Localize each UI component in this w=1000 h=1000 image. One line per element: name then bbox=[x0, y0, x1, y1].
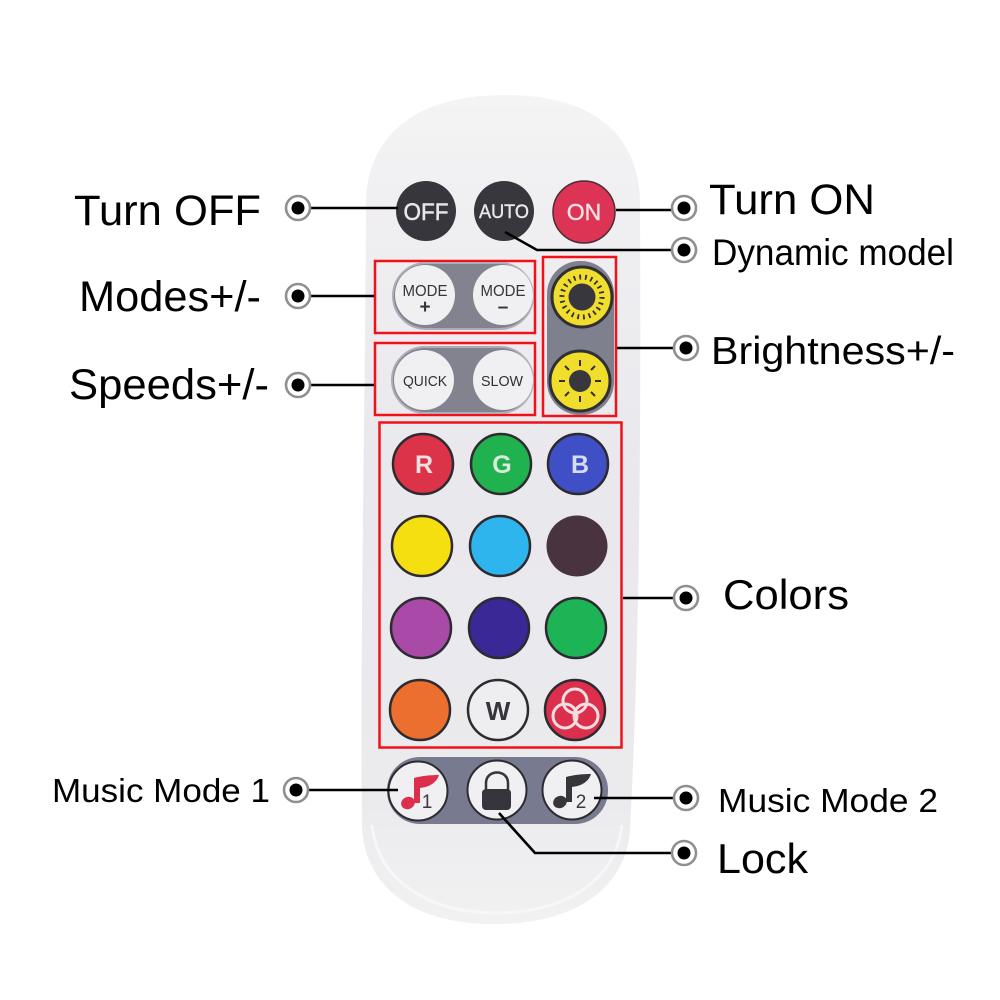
button: QUICK bbox=[394, 350, 454, 410]
button: MODE +: + bbox=[419, 297, 431, 318]
button: W: W bbox=[486, 696, 511, 726]
panel: mode buttons bbox=[375, 261, 535, 333]
label: Music Mode 2: Music Mode 2 bbox=[718, 782, 938, 819]
button: G bbox=[471, 434, 531, 494]
leader lines bbox=[298, 208, 686, 853]
label: Colors: Colors bbox=[723, 571, 849, 618]
label: Brightness+/-: Brightness+/- bbox=[711, 330, 955, 373]
label: Turn OFF: Turn OFF bbox=[74, 187, 261, 235]
button: purple bbox=[391, 598, 451, 658]
panel: speed buttons bbox=[375, 343, 535, 415]
button: color mix bbox=[545, 680, 605, 740]
button: music mode 1 bbox=[388, 762, 448, 820]
panel: brightness buttons bbox=[543, 257, 616, 416]
label: Speeds+/-: Speeds+/- bbox=[69, 361, 269, 409]
button: music mode 2: 2 bbox=[576, 792, 586, 813]
button: OFF: OFF bbox=[404, 199, 448, 226]
button: green bbox=[546, 598, 606, 658]
button: MODE -: – bbox=[498, 297, 508, 318]
button: SLOW: SLOW bbox=[481, 373, 524, 390]
button: B bbox=[548, 434, 608, 494]
button: R: R bbox=[415, 451, 433, 479]
label: Music Mode 1: Music Mode 1 bbox=[52, 772, 270, 809]
label: Dynamic model: Dynamic model bbox=[712, 232, 954, 273]
button: G: G bbox=[492, 451, 512, 479]
button: MODE +: MODE bbox=[402, 283, 448, 300]
button: R bbox=[393, 434, 453, 494]
button: MODE - bbox=[473, 265, 533, 325]
markers bbox=[284, 196, 698, 865]
button: music mode 1: 1 bbox=[422, 792, 432, 813]
label: Modes+/-: Modes+/- bbox=[79, 273, 261, 321]
button: OFF bbox=[396, 181, 456, 241]
icon: brightness down bbox=[550, 351, 610, 411]
button: W bbox=[468, 680, 528, 740]
button: B: B bbox=[571, 451, 589, 479]
button: MODE + bbox=[395, 265, 455, 325]
button: orange bbox=[390, 680, 450, 740]
button: yellow bbox=[392, 516, 452, 576]
icon: brightness up bbox=[552, 267, 612, 327]
button: SLOW bbox=[473, 350, 533, 410]
button: AUTO bbox=[474, 181, 534, 241]
button: indigo bbox=[469, 598, 529, 658]
button: sky blue bbox=[470, 516, 530, 576]
remote control body bbox=[362, 95, 640, 924]
button: MODE -: MODE bbox=[480, 283, 526, 300]
label: Lock: Lock bbox=[717, 835, 809, 882]
button: AUTO: AUTO bbox=[479, 202, 529, 223]
power buttons row bbox=[396, 181, 615, 243]
label: Turn ON: Turn ON bbox=[709, 176, 875, 224]
panel: music and lock buttons bbox=[387, 757, 608, 824]
button: ON bbox=[553, 181, 615, 243]
button: ON: ON bbox=[567, 199, 601, 225]
button: music mode 2 bbox=[542, 760, 602, 820]
button: lock bbox=[468, 760, 526, 820]
button: dark plum bbox=[546, 516, 608, 576]
panel: colors bbox=[380, 422, 622, 748]
button: QUICK: QUICK bbox=[403, 373, 447, 390]
